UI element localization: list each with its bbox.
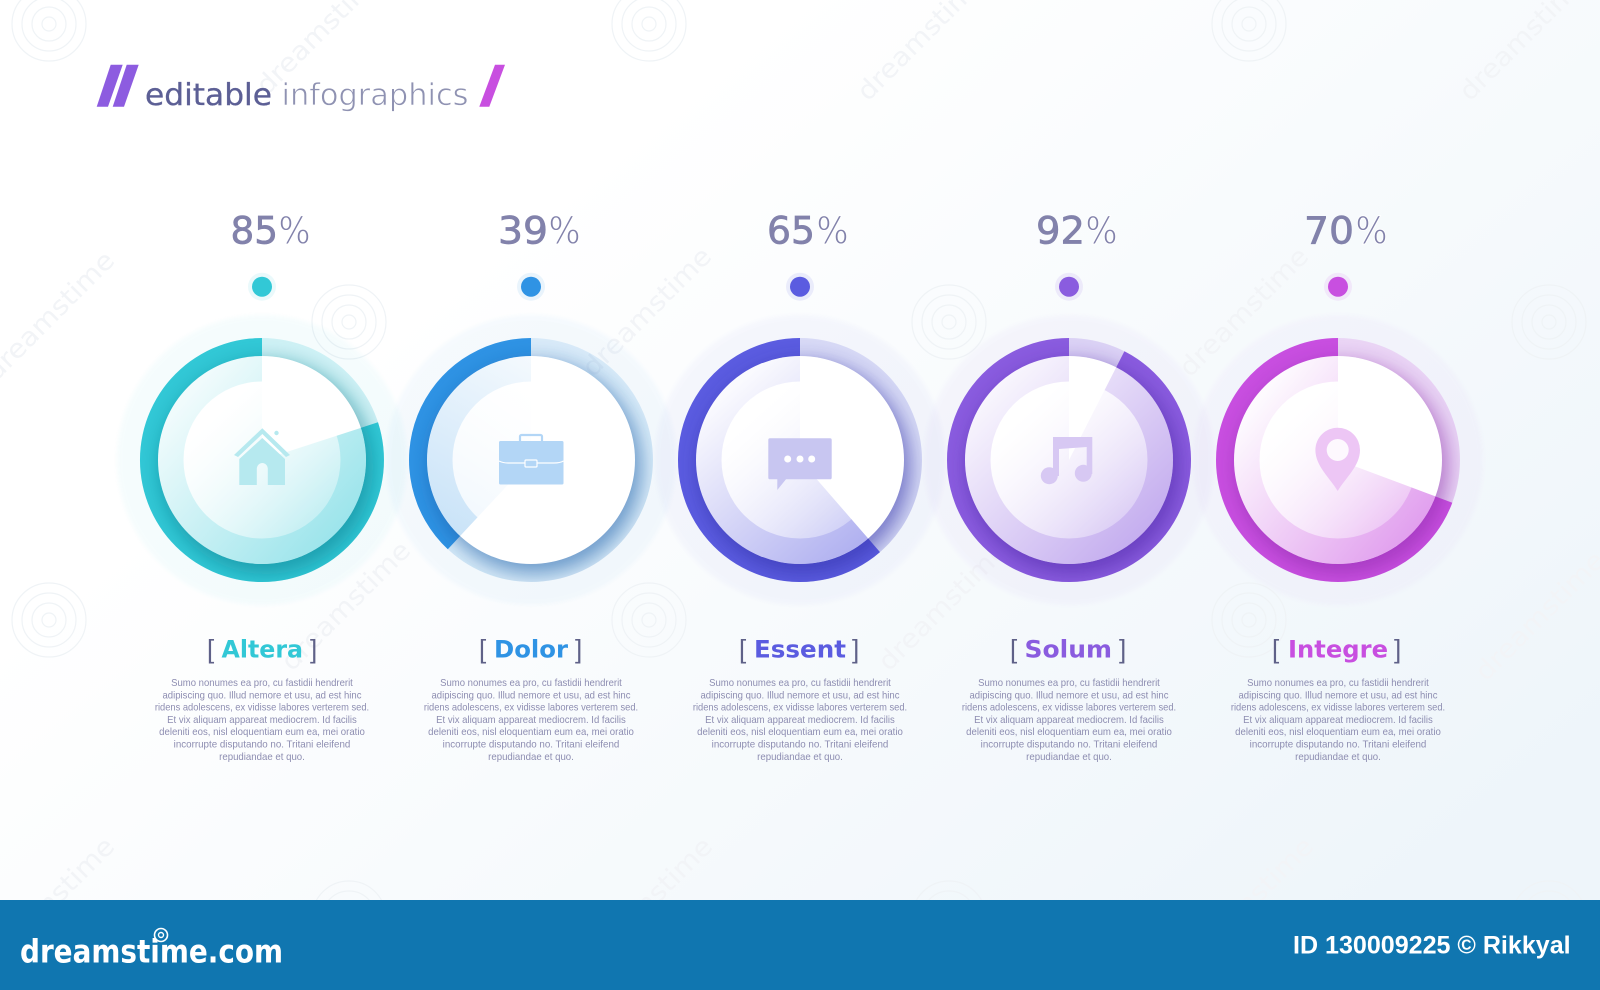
dreamstime logo: dreamstime.com (20, 933, 283, 971)
footer banner (0, 900, 1600, 990)
description: deleniti eos, nisl eloquentiam eum ea, mei oratio (428, 727, 634, 738)
description: incorrupte disputando no. Tritani eleifend (174, 740, 351, 750)
label (207, 634, 317, 664)
donut chart (947, 338, 1191, 582)
description: repudiandae et quo. (757, 752, 843, 763)
description: repudiandae et quo. (1295, 752, 1381, 763)
description: Et vix aliquam appareat mediocrem. Id facilis (436, 715, 626, 726)
watermark layer: dreamstime (1174, 242, 1315, 383)
title text: editable (145, 78, 272, 113)
label (479, 634, 582, 664)
panel: Integre (1216, 215, 1460, 762)
marker dot (1324, 273, 1352, 301)
donut chart (678, 338, 922, 582)
description: ridens adolescens, ex vidisse labores verterem sed. (1231, 703, 1445, 714)
description: repudiandae et quo. (219, 752, 305, 763)
description (1231, 678, 1445, 763)
label: ] (852, 634, 859, 664)
watermark layer: dreamstime (873, 536, 1014, 677)
percentage 65: 65 (767, 208, 815, 252)
description: ridens adolescens, ex vidisse labores verterem sed. (155, 703, 369, 714)
halo (655, 315, 945, 605)
description: incorrupte disputando no. Tritani eleifend (981, 740, 1158, 750)
description: repudiandae et quo. (1026, 752, 1112, 763)
description: repudiandae et quo. (488, 752, 574, 763)
label: [ (1010, 634, 1018, 664)
description: Sumo nonumes ea pro, cu fastidii hendrerit (440, 678, 622, 689)
percentage 65: % (816, 208, 848, 252)
title (97, 65, 505, 113)
label: [ (739, 634, 747, 664)
percentage 39: 39 (498, 208, 548, 252)
description: incorrupte disputando no. Tritani eleifend (712, 740, 889, 750)
marker dot (1055, 273, 1083, 301)
panel: Solum (947, 215, 1191, 762)
percentage 65 (767, 208, 848, 252)
description: Sumo nonumes ea pro, cu fastidii hendrerit (978, 678, 1160, 689)
description: Et vix aliquam appareat mediocrem. Id facilis (705, 715, 895, 726)
marker dot (517, 273, 545, 301)
label: Solum (1024, 636, 1112, 664)
label (1010, 634, 1126, 664)
panel: Altera (117, 208, 407, 763)
percentage 85: % (278, 208, 310, 252)
percentage 70 (1304, 208, 1388, 252)
label: Integre (1288, 636, 1388, 664)
icon: double slash (97, 65, 139, 107)
icon: music note (1041, 437, 1092, 484)
description: ridens adolescens, ex vidisse labores verterem sed. (962, 703, 1176, 714)
label: [ (479, 634, 487, 664)
description: deleniti eos, nisl eloquentiam eum ea, mei oratio (159, 727, 365, 738)
percentage 85 (230, 208, 310, 252)
panel: Essent (678, 215, 922, 762)
watermark layer: dreamstime (1470, 546, 1600, 687)
percentage 92: % (1086, 208, 1118, 252)
description: adipiscing quo. Illud nemore et usu, ad est hinc (970, 690, 1168, 701)
label: Essent (754, 636, 846, 664)
label: ] (310, 634, 317, 664)
halo (386, 315, 676, 605)
description: deleniti eos, nisl eloquentiam eum ea, mei oratio (1235, 727, 1441, 738)
description: deleniti eos, nisl eloquentiam eum ea, mei oratio (697, 727, 903, 738)
description: Et vix aliquam appareat mediocrem. Id facilis (167, 715, 357, 726)
label: [ (207, 634, 215, 664)
halo (924, 315, 1214, 605)
description: deleniti eos, nisl eloquentiam eum ea, mei oratio (966, 727, 1172, 738)
percentage 70: 70 (1304, 208, 1354, 252)
icon: house (234, 428, 290, 485)
percentage 70: % (1356, 208, 1388, 252)
icon: map pin (1315, 428, 1360, 491)
percentage 92: 92 (1036, 208, 1085, 252)
description: Sumo nonumes ea pro, cu fastidii hendrerit (171, 678, 353, 689)
icon: briefcase (499, 435, 564, 484)
donut chart (409, 338, 653, 582)
description (962, 678, 1176, 763)
description: incorrupte disputando no. Tritani eleifend (1250, 740, 1427, 750)
description (693, 678, 907, 763)
description: adipiscing quo. Illud nemore et usu, ad est hinc (432, 690, 630, 701)
halo (117, 315, 407, 605)
label (739, 634, 859, 664)
watermark layer: dreamstime (276, 536, 417, 677)
watermark layer: dreamstime (577, 242, 718, 383)
description (424, 678, 638, 763)
description: Sumo nonumes ea pro, cu fastidii hendrerit (1247, 678, 1429, 689)
label: Dolor (494, 636, 568, 664)
label: [ (1272, 634, 1280, 664)
description: adipiscing quo. Illud nemore et usu, ad est hinc (1238, 690, 1438, 701)
donut chart (1216, 338, 1460, 582)
donut chart (140, 338, 384, 582)
percentage 39: % (548, 208, 580, 252)
label: ] (1119, 634, 1126, 664)
label: Altera (222, 636, 303, 664)
panel: Dolor (386, 208, 676, 763)
marker dot (786, 273, 814, 301)
watermark layer: dreamstime (578, 832, 719, 973)
halo (1193, 315, 1483, 605)
description: ridens adolescens, ex vidisse labores verterem sed. (424, 703, 638, 714)
label: ] (575, 634, 582, 664)
percentage 85: 85 (230, 208, 278, 252)
marker dot (248, 273, 276, 301)
description: ridens adolescens, ex vidisse labores verterem sed. (693, 703, 907, 714)
label: ] (1394, 634, 1401, 664)
description: Et vix aliquam appareat mediocrem. Id facilis (974, 715, 1164, 726)
description (155, 678, 369, 763)
icon: chat bubble (768, 438, 832, 490)
title text: infographics (282, 78, 468, 113)
description: adipiscing quo. Illud nemore et usu, ad est hinc (700, 690, 900, 701)
description: Sumo nonumes ea pro, cu fastidii hendrerit (709, 678, 891, 689)
watermark layer: dreamstime (1179, 832, 1320, 973)
percentage 92 (1036, 208, 1118, 252)
description: incorrupte disputando no. Tritani eleifend (443, 740, 620, 750)
percentage 39 (498, 208, 580, 252)
icon: pink slash (479, 65, 505, 107)
image id and credit: ID 130009225 © Rikkyal (1293, 931, 1571, 959)
description: Et vix aliquam appareat mediocrem. Id facilis (1243, 715, 1433, 726)
description: adipiscing quo. Illud nemore et usu, ad est hinc (162, 690, 362, 701)
